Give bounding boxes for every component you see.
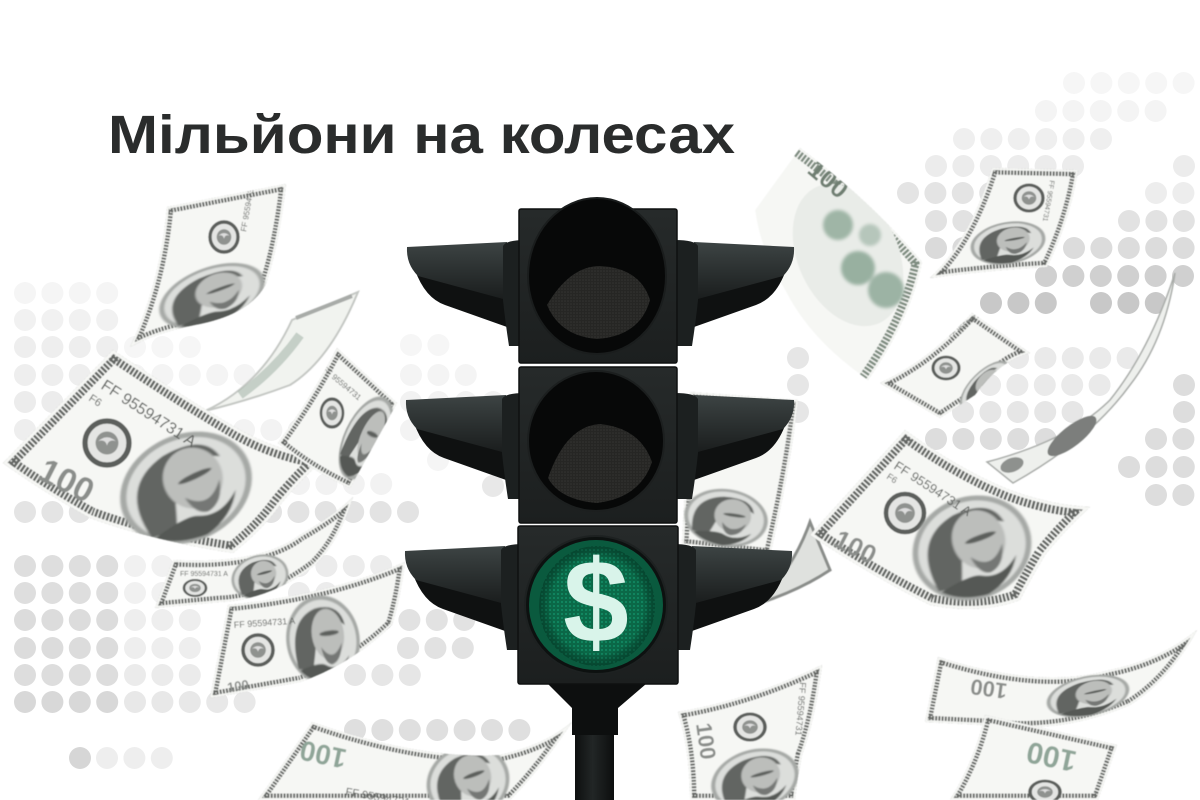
banknote: middle right: FF 95594731 bbox=[947, 310, 985, 340]
banknote: lower left front: FF 95594731 A bbox=[233, 616, 296, 630]
banknote: top right bbox=[930, 168, 1078, 278]
banknote: middle right bbox=[880, 310, 1030, 418]
banknote: large right: F6 bbox=[885, 471, 899, 485]
visors: top right bbox=[675, 240, 794, 346]
banknote: bottom right bbox=[950, 715, 1117, 800]
banknote: bottom right: 100 bbox=[1024, 735, 1079, 777]
housing: bottom section bbox=[518, 526, 678, 684]
lamp: bottom green bbox=[525, 536, 667, 674]
banknote: large left bbox=[3, 350, 325, 562]
banknote: thin curved right bbox=[987, 273, 1175, 483]
banknote: lower right bbox=[925, 630, 1197, 728]
banknote: curved lower left bbox=[155, 497, 353, 608]
banknote: bottom centre left: 100 bbox=[297, 734, 349, 774]
visors: top left bbox=[407, 240, 526, 346]
pole bbox=[575, 700, 614, 800]
dollar sign: $ bbox=[563, 536, 629, 668]
lamp: top unlit bbox=[528, 198, 666, 354]
banknote: lower left front bbox=[210, 562, 405, 698]
banknote: lower left front: 100 bbox=[226, 677, 250, 695]
visors: middle right bbox=[675, 393, 794, 499]
banknote: large right: FF 95594731 A bbox=[891, 458, 974, 519]
banknote: reverse side with green engraving: 100 bbox=[802, 154, 855, 204]
banknote: large right: 100 bbox=[829, 524, 882, 570]
banknote: lower right: 100 bbox=[969, 674, 1009, 704]
banknote: bottom centre left bbox=[258, 722, 572, 800]
banknote: curved lower left: FF 95594731 A bbox=[180, 571, 228, 578]
visors: bottom right bbox=[673, 544, 792, 650]
housing: top section bbox=[519, 209, 677, 363]
banknote: reverse side with green engraving bbox=[755, 148, 925, 380]
banknote: behind traffic light: FF 95594731 bbox=[760, 410, 767, 452]
banknote: bottom centre right bbox=[678, 665, 822, 800]
banknote: bottom centre right: 100 bbox=[691, 721, 721, 761]
housing: middle section bbox=[519, 367, 677, 523]
banknote: large left: 100 bbox=[32, 451, 100, 511]
banknote: fragment under right visor bbox=[760, 522, 830, 603]
banknote: behind traffic light bbox=[682, 392, 798, 555]
banknote: top right: FF 95594731 bbox=[1041, 180, 1055, 222]
banknote: large left: FF 95594731 A bbox=[98, 377, 199, 451]
visors: bottom left bbox=[405, 544, 524, 650]
pole bracket bbox=[548, 684, 646, 735]
banknote: top left: FF 95594731 A bbox=[239, 176, 258, 232]
background dot pattern: left cluster bbox=[25, 293, 523, 758]
banknote: top left bbox=[130, 176, 286, 347]
banknote: pale thin left bbox=[205, 292, 358, 411]
banknote: small left bbox=[278, 348, 403, 488]
lamp: middle unlit bbox=[528, 371, 664, 511]
traffic light bbox=[405, 198, 794, 800]
banknote: bottom centre right: FF 95594731 bbox=[793, 682, 808, 736]
title: Мільйони на колесах bbox=[108, 105, 735, 165]
background dot pattern: right cluster bbox=[798, 83, 1185, 495]
banknote: large left: F6 bbox=[86, 392, 104, 410]
banknote: small left: FF 95594731 bbox=[321, 365, 363, 402]
banknote: large right bbox=[810, 430, 1090, 614]
visors: middle left bbox=[406, 393, 525, 499]
